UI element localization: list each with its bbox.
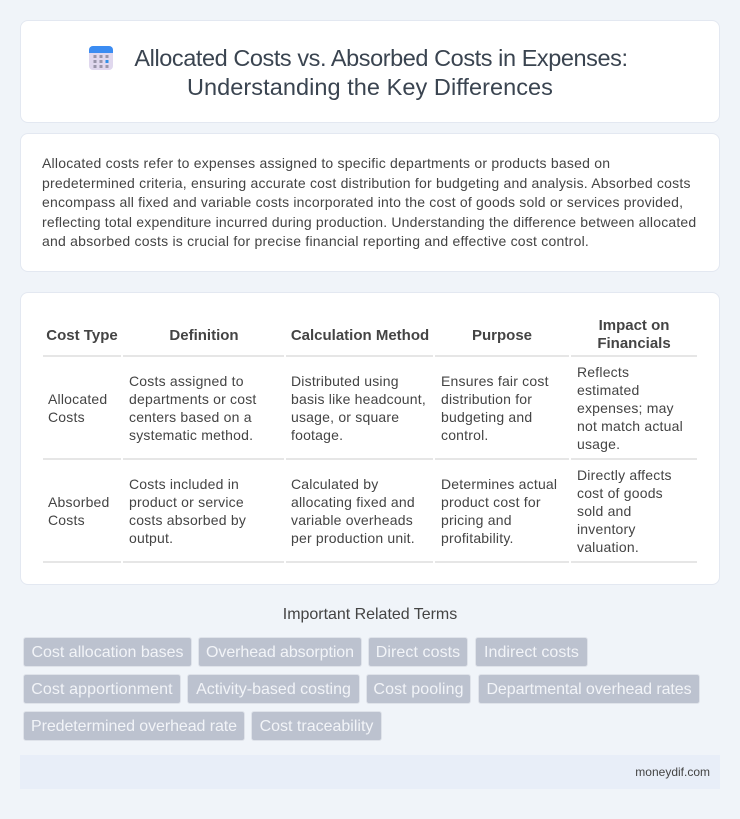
table row: absorbed costs: valuation. <box>577 539 639 555</box>
tag <box>198 637 362 667</box>
table row: absorbed costs: Determines actual <box>441 476 557 492</box>
table row: allocated costs: basis like headcount, <box>291 391 426 407</box>
table row: absorbed costs: profitability. <box>441 530 514 546</box>
table row: absorbed costs <box>48 467 672 555</box>
table header <box>46 317 671 352</box>
tag: Predetermined overhead rate <box>31 718 237 735</box>
table row: allocated costs <box>48 364 683 452</box>
intro paragraph: reflecting total expenditure incurred during production. Understanding the difference between allocated <box>42 214 696 230</box>
panel: title card <box>20 20 720 123</box>
table row: absorbed costs: pricing and <box>441 512 512 528</box>
table row: allocated costs: not match actual <box>577 418 683 434</box>
table header: Impact on <box>599 317 669 334</box>
tag: Cost traceability <box>260 718 373 735</box>
title <box>134 45 628 100</box>
table header: Calculation Method <box>291 327 429 344</box>
tag <box>475 637 588 667</box>
table row: allocated costs: footage. <box>291 427 343 443</box>
table row: allocated costs: centers based on a <box>129 409 252 425</box>
table row: absorbed costs: per production unit. <box>291 530 415 546</box>
intro paragraph <box>42 155 696 249</box>
tag: Cost pooling <box>373 681 464 698</box>
table row: allocated costs: Allocated <box>48 391 107 407</box>
table row: absorbed costs: Directly affects <box>577 467 672 483</box>
tag <box>23 637 192 667</box>
table header: Cost Type <box>46 327 118 344</box>
table row: allocated costs: budgeting and <box>441 409 532 425</box>
tag <box>23 711 245 741</box>
tag <box>478 674 700 704</box>
tag: Cost apportionment <box>31 681 173 698</box>
table row: absorbed costs: sold and <box>577 503 632 519</box>
tag: Cost allocation bases <box>31 644 184 661</box>
tag: Indirect costs <box>484 644 579 661</box>
title: Understanding the Key Differences <box>187 74 553 100</box>
intro paragraph: and absorbed costs is crucial for precise financial reporting and effective cost control. <box>42 233 589 249</box>
table row: allocated costs: estimated <box>577 382 640 398</box>
tag <box>368 637 468 667</box>
table row: allocated costs: Ensures fair cost <box>441 373 549 389</box>
tag <box>251 711 382 741</box>
intro paragraph: Allocated costs refer to expenses assigned to specific departments or products based on <box>42 155 610 171</box>
icon: calendar <box>89 46 113 70</box>
table row: absorbed costs: costs absorbed by <box>129 512 246 528</box>
table row: absorbed costs: Calculated by <box>291 476 378 492</box>
table row: absorbed costs: inventory <box>577 521 636 537</box>
table row: allocated costs: expenses; may <box>577 400 674 416</box>
table header: Purpose <box>472 327 532 344</box>
footer bar <box>20 755 720 789</box>
tag: Departmental overhead rates <box>486 681 692 698</box>
intro paragraph: predetermined criteria, ensuring accurate cost distribution for budgeting and analysis. Absorbed costs <box>42 175 691 191</box>
panel: intro text <box>20 133 720 272</box>
table row: allocated costs: usage. <box>577 436 620 452</box>
table row: absorbed costs: Costs <box>48 512 85 528</box>
footer source text: moneydif.com <box>635 765 710 779</box>
table row: allocated costs: systematic method. <box>129 427 253 443</box>
table row: absorbed costs: allocating fixed and <box>291 494 415 510</box>
table row: absorbed costs: cost of goods <box>577 485 663 501</box>
table row: absorbed costs: Costs included in <box>129 476 239 492</box>
tag <box>187 674 360 704</box>
table row: allocated costs: control. <box>441 427 489 443</box>
table row: absorbed costs: product cost for <box>441 494 541 510</box>
table row: allocated costs: usage, or square <box>291 409 399 425</box>
table row: allocated costs: Distributed using <box>291 373 399 389</box>
tag <box>366 674 471 704</box>
table row: allocated costs: Costs <box>48 409 85 425</box>
tag: Overhead absorption <box>206 644 354 661</box>
title: Allocated Costs vs. Absorbed Costs in Expenses: <box>134 45 628 71</box>
table row: absorbed costs: variable overheads <box>291 512 413 528</box>
tag: Direct costs <box>376 644 460 661</box>
tag <box>23 674 181 704</box>
table row: absorbed costs: output. <box>129 530 173 546</box>
intro paragraph: encompass all fixed and variable costs incorporated into the cost of goods sold or services provided, <box>42 194 683 210</box>
table row: absorbed costs: product or service <box>129 494 244 510</box>
panel: comparison table <box>20 292 720 585</box>
tag: Activity-based costing <box>196 681 351 698</box>
table row: absorbed costs: Absorbed <box>48 494 110 510</box>
table header: Definition <box>169 327 239 344</box>
table header: Financials <box>597 335 671 352</box>
table row: allocated costs: distribution for <box>441 391 532 407</box>
table row: allocated costs: Reflects <box>577 364 629 380</box>
table row: allocated costs: Costs assigned to <box>129 373 244 389</box>
related terms tags <box>23 637 700 741</box>
related terms heading: Important Related Terms <box>283 606 457 623</box>
table row: allocated costs: departments or cost <box>129 391 257 407</box>
